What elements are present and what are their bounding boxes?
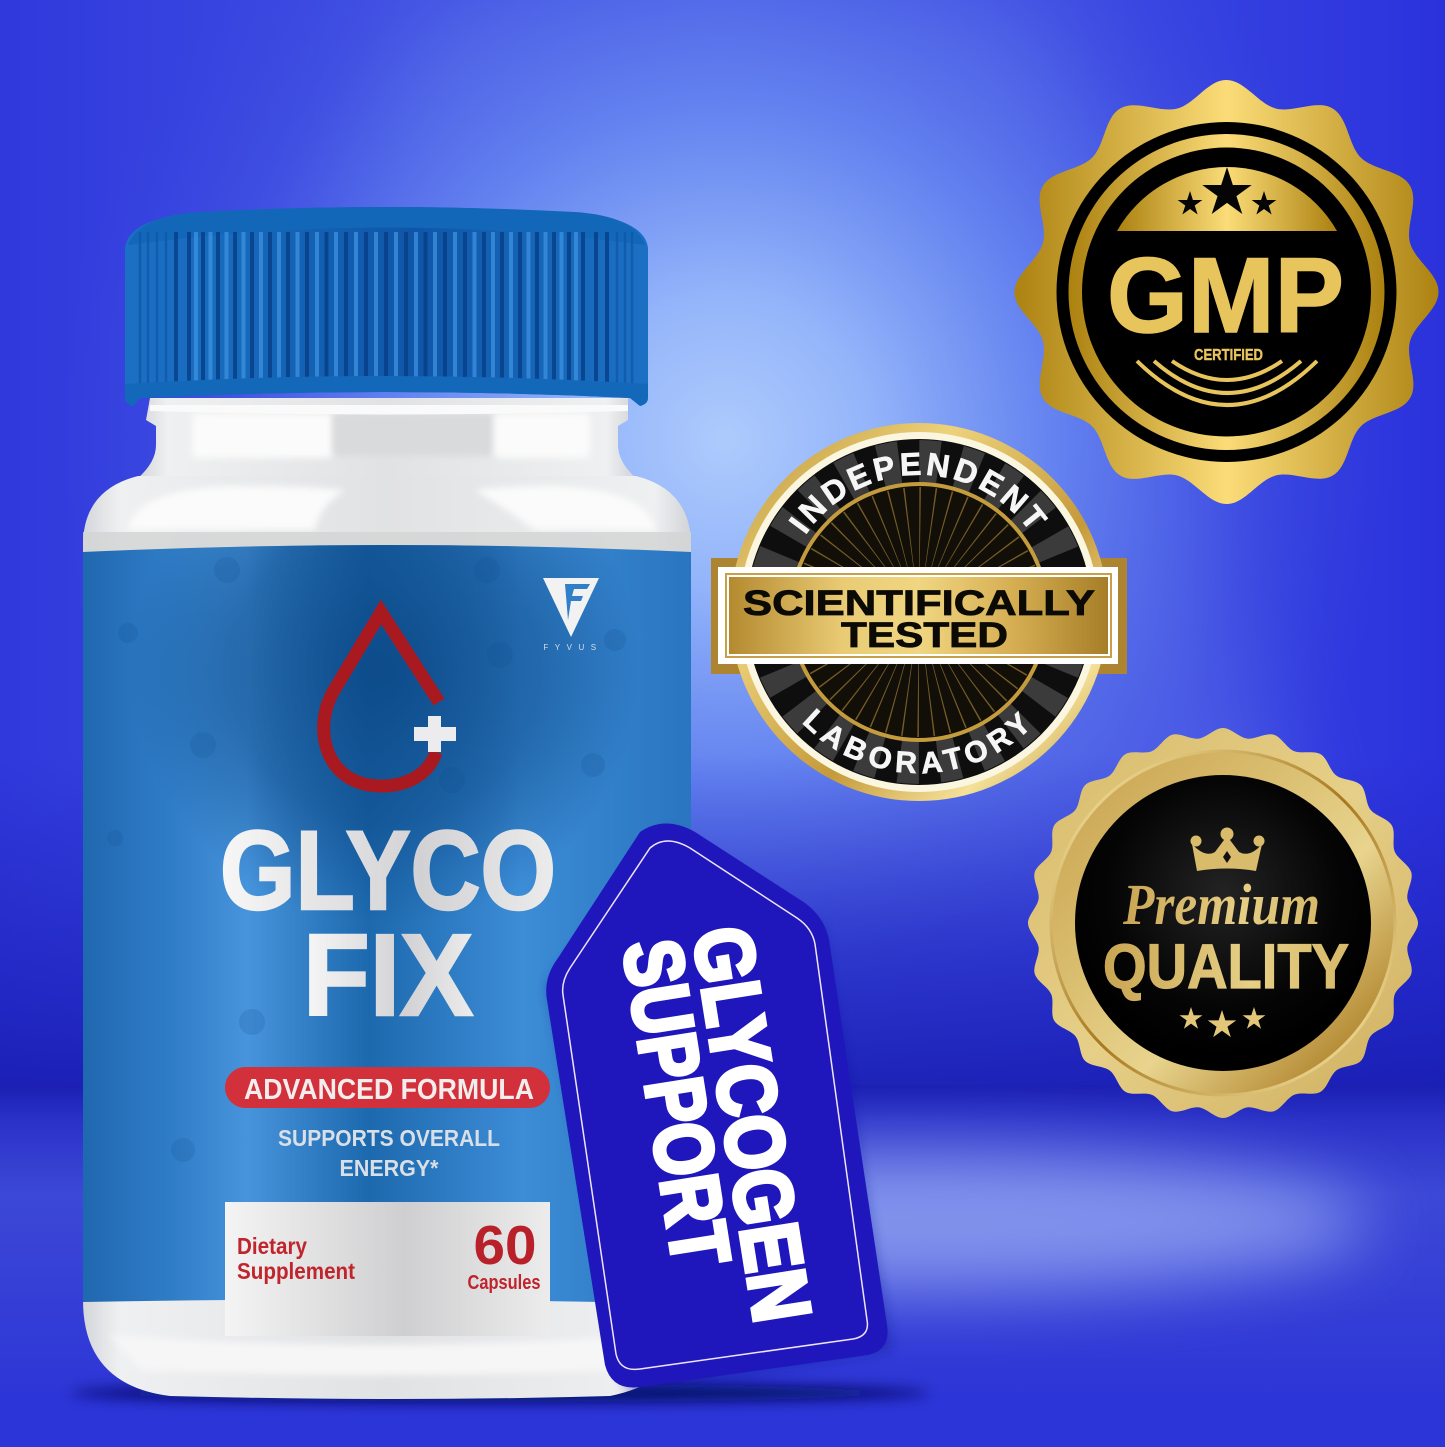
ring text: LABORATORY xyxy=(802,708,1028,774)
badge: GMP certified xyxy=(1012,76,1442,508)
ring text xyxy=(788,452,1048,774)
tag text xyxy=(605,921,827,1328)
info box xyxy=(225,1202,550,1336)
tagline xyxy=(278,1125,500,1181)
tagline: ENERGY* xyxy=(340,1155,439,1181)
premium script: Premium xyxy=(1122,872,1320,937)
tag shadow xyxy=(548,828,892,1394)
gold arcs xyxy=(1137,361,1317,405)
background: floor xyxy=(0,1085,1445,1447)
bottle neck xyxy=(138,398,636,478)
bottle shadow xyxy=(70,1384,930,1402)
GMP text: GMP xyxy=(1107,235,1344,355)
tag: glycogen support xyxy=(546,824,888,1388)
bottle label xyxy=(83,545,691,1336)
top gold segment with stars xyxy=(1117,167,1337,231)
ribbon back xyxy=(711,558,1127,674)
quality text: QUALITY xyxy=(1103,932,1349,1002)
tag text: GLYCOGEN xyxy=(675,921,827,1328)
badge: scientifically tested xyxy=(711,423,1127,801)
info box: Dietary xyxy=(237,1233,307,1259)
bottle cap xyxy=(125,207,648,406)
stars xyxy=(1180,1007,1265,1037)
ribbon band: TESTED xyxy=(841,616,1008,655)
product name: GLYCO xyxy=(220,808,556,933)
bottle body xyxy=(83,476,691,1399)
sunburst xyxy=(855,548,983,676)
product name: FIX xyxy=(303,910,473,1040)
label network texture xyxy=(107,557,626,1162)
tagline: SUPPORTS OVERALL xyxy=(278,1125,500,1151)
info box: 60 xyxy=(474,1214,536,1276)
brand logo: Fyvus xyxy=(543,578,603,652)
ribbon band xyxy=(718,567,1118,664)
badge: premium quality xyxy=(1024,724,1422,1122)
info box: Supplement xyxy=(237,1258,355,1284)
crown icon xyxy=(1190,828,1264,871)
ring text: INDEPENDENT xyxy=(788,452,1048,534)
advanced formula pill: ADVANCED FORMULA xyxy=(244,1074,534,1106)
segmented ring xyxy=(769,462,1069,762)
icon: blood drop with plus xyxy=(324,612,456,786)
brand logo: Fyvus: FYVUS xyxy=(543,643,603,652)
certified text: CERTIFIED xyxy=(1194,347,1263,364)
background: studio wall xyxy=(0,0,1445,1110)
ribbon band: SCIENTIFICALLY xyxy=(743,584,1095,623)
info box: Capsules xyxy=(468,1272,540,1294)
product bottle xyxy=(83,207,691,1399)
product name xyxy=(220,808,556,1040)
tag text: SUPPORT xyxy=(605,934,746,1272)
